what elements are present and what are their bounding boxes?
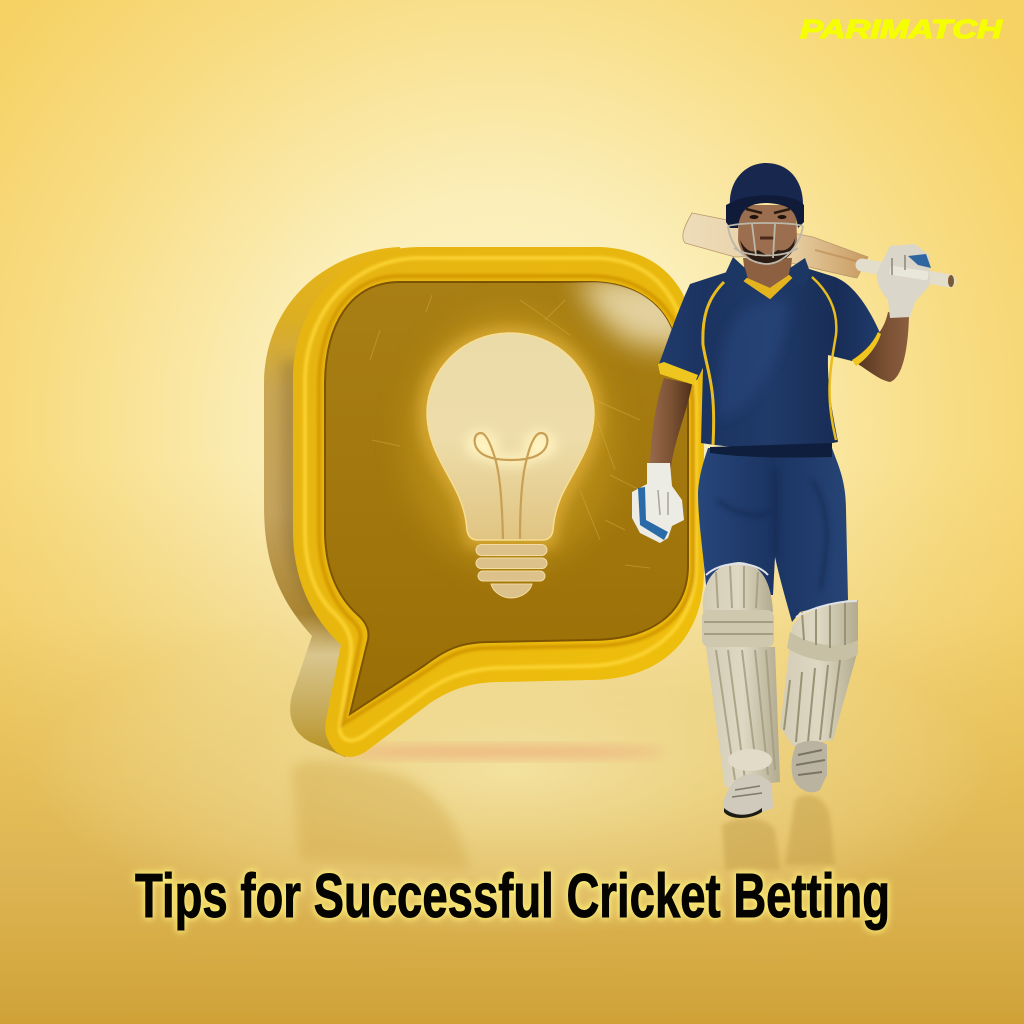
shirt xyxy=(658,257,881,448)
right arm xyxy=(851,312,909,382)
trouser folds xyxy=(718,470,827,590)
cricket player xyxy=(632,163,954,818)
back shoe xyxy=(792,741,827,792)
speech bubble xyxy=(264,247,704,757)
top glove xyxy=(877,244,931,318)
bulb glass xyxy=(427,333,594,540)
collar right xyxy=(788,258,810,288)
collar left xyxy=(726,257,749,285)
bulb glow xyxy=(418,326,602,548)
bubble side extrusion xyxy=(264,247,400,757)
neck skin xyxy=(743,258,792,292)
left leg pad xyxy=(702,562,780,788)
logo: Parimatch: PARIMATCH xyxy=(800,14,1004,44)
bubble inner panel xyxy=(325,282,688,714)
bulb screw base xyxy=(476,544,547,598)
left arm xyxy=(650,378,692,468)
filament glow xyxy=(466,431,556,466)
icon: light bulb xyxy=(418,326,602,598)
bubble front rim xyxy=(293,247,704,757)
bat xyxy=(683,213,954,287)
helmet and face xyxy=(726,163,804,264)
right leg pad xyxy=(780,600,858,746)
filament xyxy=(475,433,547,539)
shirt trim xyxy=(703,277,836,445)
collar V trim xyxy=(745,276,791,298)
trousers xyxy=(698,448,848,622)
panel sheen and scratches xyxy=(370,278,695,570)
floor reflections xyxy=(292,746,835,870)
front shoe xyxy=(723,775,773,818)
lower glove xyxy=(632,463,684,543)
waistband xyxy=(710,443,832,458)
